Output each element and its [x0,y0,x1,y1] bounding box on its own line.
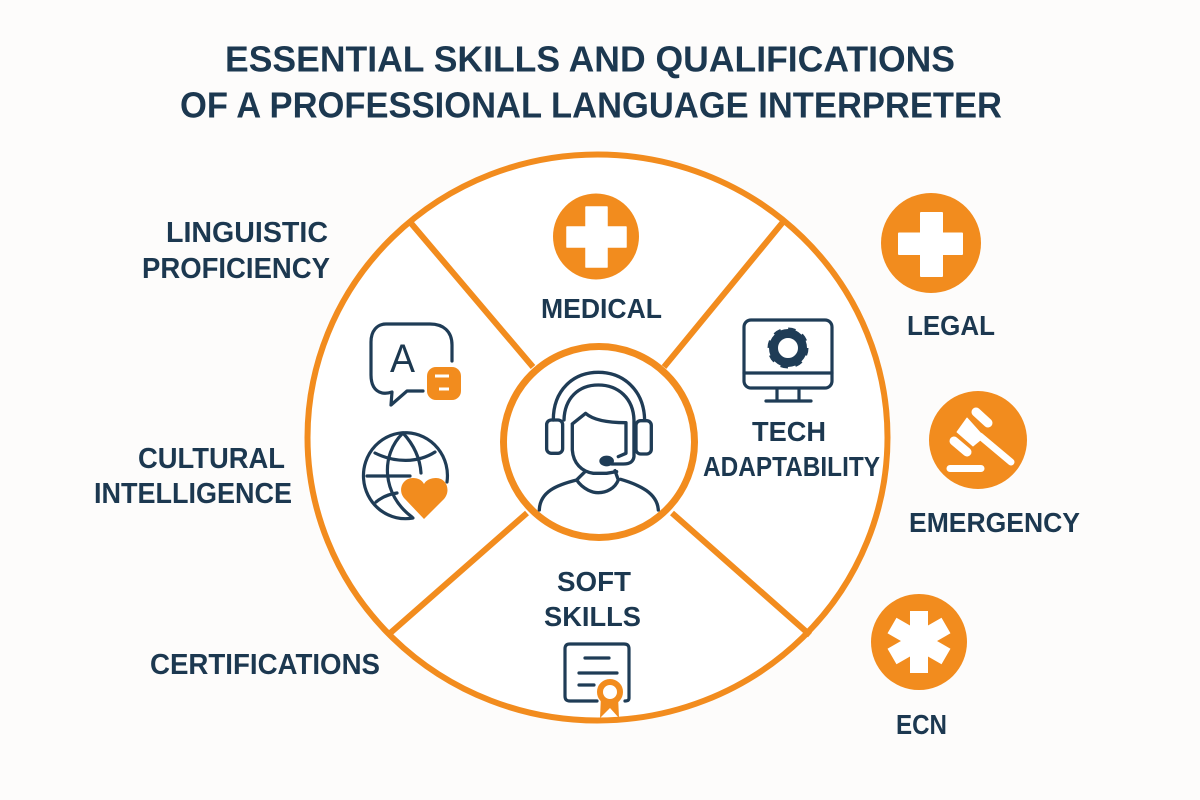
label: linguistic proficiency: LINGUISTIC [166,217,328,249]
label: soft skills: SOFT [557,566,631,597]
icon: medical cross badge in wheel [553,194,639,280]
label: linguistic proficiency [142,217,330,285]
label: tech adaptability [703,416,880,482]
icon: translation speech bubble: A [390,337,415,381]
icon: translation speech bubble [371,324,461,405]
main wheel [308,154,888,720]
icon: legal badge with cross [881,193,981,293]
label: soft skills [544,566,641,632]
title [180,38,1002,126]
label: cultural intelligence: CULTURAL [138,443,285,475]
title: OF A PROFESSIONAL LANGUAGE INTERPRETER [180,84,1002,126]
label: tech adaptability: ADAPTABILITY [703,451,880,482]
label: cultural intelligence: INTELLIGENCE [94,478,292,510]
icon: interpreter with headset [539,372,658,510]
label: linguistic proficiency: PROFICIENCY [142,253,330,285]
center circle [504,346,694,538]
label: legal: LEGAL [907,310,995,341]
label: certifications: CERTIFICATIONS [150,649,380,681]
icon: monitor with gear [744,320,832,401]
label: emergency: EMERGENCY [909,507,1080,538]
label: soft skills: SKILLS [544,601,641,632]
label: cultural intelligence [94,443,292,510]
icon: ECN badge with asterisk [871,594,967,690]
icon: emergency badge with gavel [929,391,1027,489]
icon: globe with heart [363,433,447,519]
icon: certificate [565,644,629,718]
title: ESSENTIAL SKILLS AND QUALIFICATIONS [225,38,955,80]
label: tech adaptability: TECH [752,416,826,447]
label: ecn: ECN [896,709,947,740]
label: medical: MEDICAL [541,293,662,324]
